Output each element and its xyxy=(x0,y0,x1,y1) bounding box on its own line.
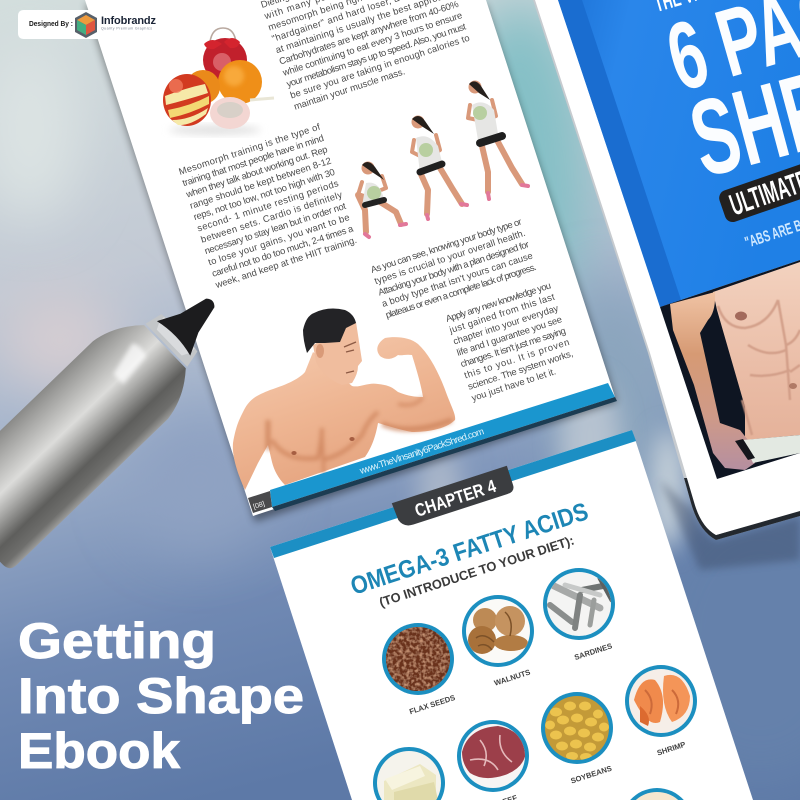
page text: body type conclusion: plateaus or even a complete lack of progress. xyxy=(384,261,538,320)
page text: mesomorph training: second- 1 minute resting periods xyxy=(196,177,340,233)
page text: apply new knowledge: this to you. It is proven xyxy=(463,336,571,380)
page text: apply new knowledge: you just have to let it. xyxy=(470,365,557,403)
ebook page: chapter 4 omega-3 xyxy=(270,430,753,800)
page text: mesomorph training: range should be kept between 8-12 xyxy=(188,155,332,211)
page text: mesomorph training: necessary to stay lean but in order not xyxy=(203,200,347,256)
photo: muscular man flexing xyxy=(233,309,455,490)
title: Getting Into Shape Ebook: Into Shape xyxy=(18,668,304,724)
logo badge: designed by infobrandz: Designed By : xyxy=(29,19,73,28)
man's head xyxy=(303,309,362,385)
page number box xyxy=(248,491,272,513)
page text: mesomorph training: week, and keep at the HIIT training. xyxy=(213,234,358,290)
arm and hand xyxy=(670,292,755,470)
page text: mesomorph training: between sets. Cardio is definitely xyxy=(199,189,344,245)
page text: apply new knowledge: just gained from this last xyxy=(447,291,556,336)
page text: apply new knowledge: Apply any new knowledge you xyxy=(444,279,552,324)
label: walnuts: WALNUTS xyxy=(493,668,531,688)
page text: dieting: while continuing to eat every 3 hours to ensure xyxy=(280,9,463,78)
tablet screen: torso photo xyxy=(660,260,800,479)
title: omega-3 fatty acids: OMEGA-3 FATTY ACIDS xyxy=(347,497,592,601)
food: partial circle at the bottom edge xyxy=(630,788,684,800)
logo badge: designed by infobrandz: Quality Premium Graphics xyxy=(101,26,152,30)
label: sardines: SARDINES xyxy=(573,641,613,662)
icon: woman squatting xyxy=(358,162,406,237)
label: shrimp: SHRIMP xyxy=(656,740,687,757)
food: beef xyxy=(457,720,529,792)
page number box: [08] xyxy=(252,501,266,511)
page text: dieting: your metabolism stays up to speed. Also, you must xyxy=(285,20,468,89)
title: Getting Into Shape Ebook: Ebook xyxy=(18,723,180,779)
food: sardines xyxy=(543,568,615,640)
towel xyxy=(743,435,800,463)
food: walnuts xyxy=(462,595,534,667)
label: flax seeds: FLAX SEEDS xyxy=(408,693,456,716)
footer url: www.TheVinsanity6PackShred.com xyxy=(358,426,486,477)
ebook page: body types xyxy=(85,0,617,522)
page text: body type conclusion: a body type that isn't yours can cause xyxy=(380,250,534,309)
abs shading xyxy=(718,300,800,435)
page text: mesomorph training: when they talk about working out. Rep xyxy=(184,143,329,200)
torso xyxy=(713,262,800,440)
page text: dieting xyxy=(258,0,475,112)
chapter tab: CHAPTER 4 xyxy=(412,476,498,521)
page text: mesomorph training: reps, not too low, not too high with 30 xyxy=(192,166,336,222)
page text: apply new knowledge: chapter into your everyday xyxy=(452,302,560,347)
page text: body type conclusion: Attacking your body with a plan designed for xyxy=(377,238,530,298)
page footer band xyxy=(248,383,617,513)
tablet xyxy=(533,0,800,570)
page text: mesomorph training: training that most people have in mind xyxy=(181,132,325,188)
chapter tab xyxy=(392,466,515,529)
page text: body type conclusion: types is crucial to your overall health. xyxy=(373,227,527,286)
icon: fruit, alarm clock and tape measure xyxy=(163,28,274,135)
logo badge: designed by infobrandz: Infobrandz xyxy=(101,15,156,27)
page text: mesomorph training xyxy=(176,120,359,290)
page text: apply new knowledge xyxy=(443,279,578,403)
food: shrimp xyxy=(625,665,697,737)
tablet screen: blue cover xyxy=(550,0,800,310)
label: soybeans: SOYBEANS xyxy=(570,764,613,785)
subtitle: (TO INTRODUCE TO YOUR DIET): xyxy=(377,533,576,610)
food: tofu xyxy=(373,747,445,800)
title: Getting Into Shape Ebook: Getting xyxy=(18,613,216,669)
cover headline: 6 PACK: 6 xyxy=(656,0,719,112)
icon: woman standing xyxy=(468,80,528,199)
page text: apply new knowledge: changes. It isn't just me saying xyxy=(459,325,567,369)
page text: mesomorph training: Mesomorph training is the type of xyxy=(177,121,322,177)
cover headline: 6 PACK xyxy=(669,0,800,88)
food: flax seeds xyxy=(382,623,454,695)
page text: body type conclusion: As you can see, knowing your body type or xyxy=(369,216,523,275)
page text: dieting: maintain your muscle mass. xyxy=(292,65,406,112)
page text: apply new knowledge: life and I guarantee you see xyxy=(455,313,563,358)
logo badge: designed by infobrandz xyxy=(18,10,156,39)
chapter top band xyxy=(270,430,636,558)
title: Getting Into Shape Ebook xyxy=(18,613,304,779)
food: soybeans xyxy=(541,692,613,764)
page text: dieting: be sure you are taking in enough calories to xyxy=(289,32,471,100)
page text: mesomorph training: careful not to do too much, 2-4 times a xyxy=(210,222,355,279)
page text: body type conclusion xyxy=(369,216,538,320)
water bottle xyxy=(0,262,250,572)
icon: infobrandz hexagon xyxy=(75,12,97,38)
page text: mesomorph training: to lose your gains, you want to be xyxy=(207,211,351,267)
page text: apply new knowledge: science. The system works, xyxy=(466,347,574,392)
icon: woman half squat xyxy=(412,116,467,219)
